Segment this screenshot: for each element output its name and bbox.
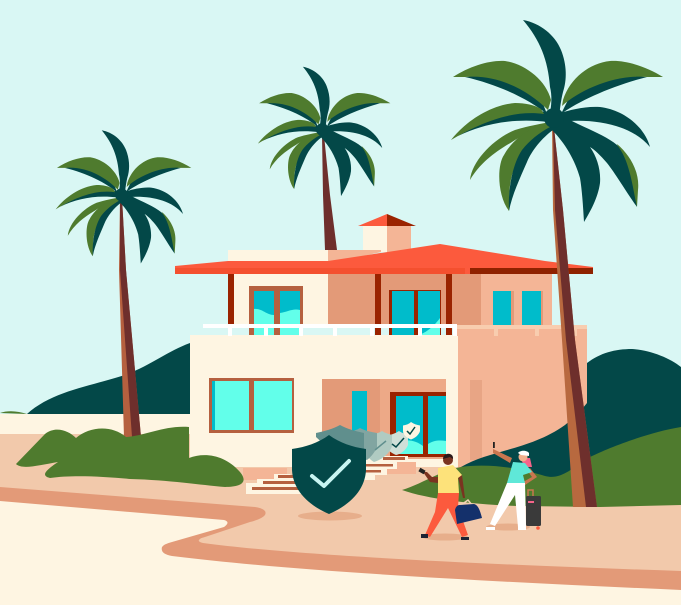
right green hill (402, 427, 681, 507)
lower window (209, 378, 294, 433)
upper floor walls (234, 273, 552, 328)
palm crown: right (451, 20, 663, 222)
right hill (461, 349, 681, 490)
check mark (312, 461, 349, 486)
woman taking selfie (486, 442, 537, 530)
right trunk (552, 128, 597, 507)
lower floor left wall (190, 335, 458, 467)
bush (16, 427, 244, 487)
palm crown: left (56, 130, 191, 264)
posts (228, 273, 452, 335)
peach path (0, 434, 681, 580)
lower floor right wall (458, 335, 587, 470)
chimney (358, 214, 416, 252)
man walking (418, 454, 469, 540)
right trunk shade (553, 128, 597, 507)
small left green hill (0, 411, 27, 414)
left hill (27, 343, 195, 414)
palm crown: middle (258, 67, 390, 196)
door (390, 392, 446, 457)
palm trunk: left shade (120, 198, 141, 437)
balcony railing (203, 324, 587, 336)
duffel bag (455, 500, 482, 524)
parapet (228, 250, 381, 264)
palm trunk: left (119, 198, 141, 437)
entrance recess (322, 379, 446, 459)
upper windows right (493, 291, 543, 325)
path border band (0, 487, 681, 590)
upper window centre (389, 290, 441, 336)
roof (175, 244, 593, 274)
cream ground (0, 414, 681, 605)
shield shadow (298, 512, 362, 520)
fading shields (316, 422, 420, 462)
upper window left (249, 286, 303, 336)
shield (292, 435, 366, 514)
palm trunk: middle (322, 135, 337, 250)
stairs (243, 456, 416, 494)
suitcase (526, 490, 541, 530)
wall inset (470, 380, 482, 460)
